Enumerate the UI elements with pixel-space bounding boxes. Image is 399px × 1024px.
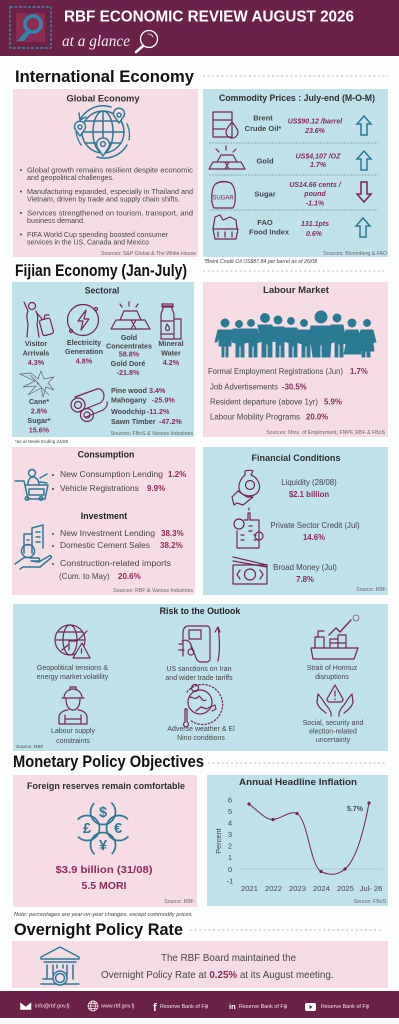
heading: Monetary Policy Objectives: Monetary Policy Objectives — [13, 753, 204, 771]
panel: Labour Market: Sources: Mins. of Employment, FNPF, RBF & FBoS — [266, 430, 386, 436]
footnote: percentages: Note: percentages are year-on-year changes, except commodity prices. — [14, 912, 193, 918]
panel: Overnight Policy Rate — [12, 941, 388, 988]
panel: Sectoral: 4.3% — [28, 358, 45, 367]
line chart: inflation: 6 — [228, 796, 232, 804]
list: timber: -11.2% — [147, 407, 170, 416]
line chart: inflation: 2025 — [337, 884, 354, 893]
text block: global bullets: Vietnam, driven by trade and supply chain shifts. — [27, 196, 180, 204]
text block: global bullets: FIFA World Cup spending boosted consumer — [27, 232, 169, 239]
panel: Financial Conditions: Private Sector Credit (Jul) — [270, 521, 360, 530]
footer: facebook — [153, 1002, 208, 1014]
panel: Sectoral: Water — [161, 348, 181, 358]
risk: geopolitical — [37, 625, 109, 681]
list: timber: Sawn Timber — [111, 417, 156, 426]
icon: money bag — [232, 470, 260, 505]
title: RBF ECONOMIC REVIEW AUGUST 2026 — [64, 8, 354, 26]
panel: Annual Headline Inflation — [207, 775, 388, 906]
row: Gold: US$4,107 /OZ — [296, 154, 341, 160]
panel: Overnight Policy Rate: The RBF Board maintained the — [161, 953, 297, 964]
line chart: inflation: 4 — [228, 818, 232, 828]
panel: Annual Headline Inflation: Source: FBoS — [354, 899, 387, 905]
list: labour: 1.7% — [350, 367, 368, 376]
text block: global bullets: and geopolitical challenges. — [27, 175, 114, 182]
risk: Hormuz: disruptions — [315, 674, 349, 681]
row: Sugar: SUGAR — [212, 196, 234, 202]
footer: facebook: Reserve Bank of Fiji — [160, 1004, 208, 1010]
list: labour — [208, 367, 368, 422]
list: labour: Formal Employment Registrations (Jun) — [208, 367, 343, 376]
row: Brent: 23.6% — [304, 128, 326, 135]
panel: Annual Headline Inflation: Annual Headline Inflation — [239, 777, 357, 787]
row: Brent: US$90.12 /barrel — [288, 118, 343, 126]
risk: sanctions: and wider trade tariffs — [165, 675, 233, 682]
row: Brent: Brent — [253, 114, 273, 122]
icon: magnifier — [136, 30, 158, 52]
panel: Sectoral: Arrivals — [23, 348, 49, 358]
panel: Consumption and Investment: 38.2% — [160, 541, 183, 550]
panel: Consumption and Investment: 20.6% — [118, 572, 141, 581]
list: timber: 3.4% — [149, 386, 166, 395]
panel: Commodity Prices: Commodity Prices : July-end (M-O-M) — [219, 93, 375, 103]
panel: Global Economy — [13, 89, 198, 257]
panel: Sectoral: Electricity — [67, 338, 101, 347]
risk: geopolitical: energy market volatility — [37, 674, 109, 681]
panel: Financial Conditions: Liquidity (28/08) — [281, 478, 337, 487]
panel: Risk to the Outlook: Risk to the Outlook — [160, 606, 240, 616]
risk: social: uncertainty — [316, 737, 351, 744]
footer: youtube — [305, 1003, 369, 1011]
heading: International Economy: International Economy — [15, 68, 195, 86]
panel: Financial Conditions: 7.8% — [296, 575, 314, 584]
heading: Fijian Economy: Fijian Economy (Jan-July) — [15, 262, 187, 280]
panel: Sectoral: Sugar* — [27, 416, 51, 425]
panel: Consumption and Investment: 1.2% — [168, 470, 186, 479]
line chart: inflation: 3 — [228, 830, 232, 839]
panel: Labour Market: Labour Market — [263, 285, 329, 295]
icon: electricity — [68, 304, 98, 336]
risk: social — [303, 685, 363, 744]
list: timber — [111, 386, 182, 426]
icon: cane flower — [20, 371, 54, 397]
list: labour: 20.0% — [306, 412, 328, 422]
line chart: inflation: 2024 — [313, 884, 330, 893]
icon: banknotes — [233, 557, 267, 584]
risk: weather: Adverse weather & El — [167, 726, 235, 733]
icon: logs — [71, 389, 107, 422]
text block: global bullets: business demand. — [27, 218, 85, 225]
panel: Financial Conditions: Financial Conditions — [252, 453, 341, 463]
panel: Labour Market — [203, 282, 388, 437]
footer: website — [88, 1001, 134, 1011]
panel: Sectoral: Concentrates — [106, 342, 152, 350]
risk: weather: Nino conditions — [177, 735, 225, 742]
panel: Consumption and Investment: Construction-related imports — [60, 559, 171, 568]
icon: currency coins — [69, 794, 137, 863]
panel: Sectoral: Cane* — [29, 397, 49, 406]
panel: Consumption and Investment: Sources: RBF & Various Industries — [113, 588, 193, 594]
icon: building — [234, 508, 263, 548]
icon: currency coins: ¥ — [99, 838, 107, 854]
panel: Sectoral: Visitor — [25, 339, 47, 348]
panel: Consumption and Investment: New Investment Lending — [60, 529, 155, 538]
risk: labour: Labour supply — [51, 728, 95, 735]
list: labour: Resident departure (above 1yr) — [210, 398, 318, 406]
panel: Financial Conditions: Source: RBF — [356, 587, 386, 593]
risk: labour — [51, 687, 95, 745]
row: Gold: 1.7% — [310, 162, 327, 169]
panel: Financial Conditions: Broad Money (Jul) — [273, 563, 337, 572]
icon: currency coins: € — [114, 821, 122, 837]
risk: social: election-related — [309, 728, 357, 736]
panel: Foreign reserves: 5.5 MORI — [82, 880, 127, 892]
panel: Risk to the Outlook — [13, 604, 388, 751]
risk: Hormuz: Strait of Hormuz — [307, 665, 358, 672]
panel: Consumption and Investment: Vehicle Registrations — [60, 484, 139, 493]
footer: facebook: f — [153, 1002, 157, 1014]
risk: labour: constraints — [56, 738, 90, 745]
panel: Foreign reserves — [13, 775, 197, 907]
panel: Financial Conditions: $2.1 billion — [289, 490, 329, 499]
header banner — [0, 0, 399, 56]
footer: email: info@rbf.gov.fj — [35, 1004, 69, 1010]
icon: visitor — [24, 302, 54, 337]
text block: global bullets: Global growth remains resilient despite economic — [27, 168, 194, 174]
panel: Sectoral — [12, 282, 194, 437]
line chart: inflation: 2021 — [241, 884, 258, 893]
line chart: inflation: 2023 — [289, 884, 306, 893]
line chart: inflation: 2 — [228, 842, 232, 850]
icon: globe with pins — [74, 106, 129, 158]
panel: Consumption and Investment: Consumption — [78, 450, 134, 460]
panel: Consumption and Investment: 38.3% — [161, 529, 184, 538]
text block: global bullets — [20, 168, 194, 246]
panel: Sectoral: Sectoral — [85, 286, 119, 296]
panel: Commodity Prices — [203, 89, 388, 257]
panel: Overnight Policy Rate: Overnight Policy Rate at 0.25% at its August meeting. — [101, 970, 334, 981]
list: timber: -47.2% — [159, 417, 182, 426]
panel: Commodity Prices: Sources: Bloomberg & FAO — [323, 251, 387, 257]
icon: investment — [15, 525, 51, 569]
icon: currency coins: $ — [99, 805, 107, 821]
footer: email — [20, 1002, 69, 1010]
icon: shopping — [15, 470, 48, 500]
risk: geopolitical: Geopolitical tensions & — [37, 665, 108, 672]
text block: global bullets: Manufacturing expanded, especially in Thailand and — [27, 189, 193, 196]
panel: Foreign reserves: Source: RBF — [164, 899, 194, 905]
row: FAO: 131.1pts — [301, 221, 329, 228]
footer: linkedin — [229, 1002, 287, 1011]
subtitle: at a glance — [62, 33, 130, 50]
list: timber: -25.9% — [152, 396, 175, 404]
line chart: inflation: 2022 — [265, 884, 282, 893]
panel: Sectoral: 15.6% — [29, 426, 50, 434]
row: Brent — [213, 112, 371, 138]
risk: weather — [167, 684, 235, 742]
line chart: inflation — [214, 796, 383, 893]
row: Sugar: pound — [303, 191, 326, 198]
panel: Foreign reserves: $3.9 billion (31/08) — [56, 864, 152, 876]
line chart: inflation: 1 — [228, 853, 232, 862]
panel: Sectoral: 2.8% — [31, 406, 48, 416]
line chart: inflation: -1 — [227, 876, 233, 886]
line chart: inflation: 5.7% — [347, 806, 364, 813]
row: Sugar: -1.1% — [306, 200, 325, 208]
icon: water — [161, 304, 181, 339]
panel: Sectoral: 4.8% — [76, 356, 93, 366]
subheading: Investment: Investment — [81, 511, 127, 521]
heading: Overnight Policy Rate: Overnight Policy Rate — [14, 921, 183, 939]
list: labour: -30.5% — [282, 382, 307, 392]
line chart: inflation: Jul- 26 — [360, 884, 382, 893]
row: FAO — [213, 215, 370, 239]
footnote: Brent: *Brent Crude Oil US$87.84 per barrel as of 26/08 — [204, 259, 317, 265]
panel: Sectoral: Mineral — [158, 339, 184, 348]
row: Gold — [209, 146, 371, 170]
list: labour: Labour Mobility Programs — [210, 412, 300, 422]
panel: Sectoral: Sources: FBoS & Various Industries — [111, 431, 193, 437]
panel: Sectoral: Generation — [65, 347, 103, 356]
panel: Consumption and Investment: Domestic Cement Sales — [60, 541, 150, 550]
line chart: inflation: 5 — [228, 807, 232, 816]
text block: global bullets: Services strengthened on tourism, transport, and — [27, 210, 193, 218]
risk: social: Social, security and — [303, 720, 363, 727]
panel: Sectoral: -21.8% — [117, 368, 140, 377]
footer: website: www.rbf.gov.fj — [100, 1004, 134, 1010]
footer bar — [0, 991, 399, 1018]
icon: currency coins: £ — [83, 821, 91, 837]
panel: Risk to the Outlook: Source: RBF — [16, 744, 44, 750]
list: timber: Woodchip — [111, 407, 146, 416]
row: Gold: Gold — [256, 156, 274, 166]
icon: gold bars — [111, 302, 150, 329]
footer: youtube: Reserve Bank of Fiji — [321, 1004, 369, 1010]
row: FAO: Food Index — [249, 228, 290, 236]
panel: Consumption and Investment — [12, 447, 195, 595]
panel: Sectoral: 4.2% — [163, 358, 180, 367]
panel: Foreign reserves: Foreign reserves remain comfortable — [27, 781, 185, 791]
list: labour: Job Advertisements — [210, 382, 278, 392]
text block: global bullets: services in the US, Canada and Mexico — [27, 240, 149, 246]
row: Sugar: US14.66 cents / — [289, 182, 342, 189]
line chart: inflation: 0 — [228, 865, 232, 874]
panel: Financial Conditions — [203, 447, 388, 595]
row: Sugar: Sugar — [254, 190, 276, 198]
risk: Hormuz — [307, 615, 359, 681]
icon: workers — [215, 311, 376, 357]
panel: Sectoral: Gold — [121, 333, 137, 342]
footer: linkedin: Reserve Bank of Fiji — [239, 1004, 287, 1010]
row: Sugar — [212, 182, 371, 208]
panel: Financial Conditions: 14.6% — [303, 533, 325, 542]
line chart: inflation: Percent — [214, 828, 223, 854]
panel: Consumption and Investment: 9.9% — [147, 484, 165, 493]
risk: sanctions: US sanctions on Iran — [167, 666, 232, 673]
list: labour: 5.9% — [324, 398, 342, 406]
panel: Consumption and Investment: New Consumption Lending — [60, 470, 163, 479]
row: Brent: Crude Oil* — [245, 124, 281, 133]
icon: bank — [41, 947, 79, 985]
panel: Consumption and Investment: (Cum. to May) — [59, 572, 110, 581]
risk: sanctions — [165, 626, 233, 682]
footnote: week ending: *as at Week Ending 24/08 — [15, 439, 68, 444]
list: timber: Mahogany — [111, 396, 147, 404]
row: FAO: FAO — [257, 218, 273, 227]
panel: Sectoral: Gold Doré — [111, 359, 145, 368]
panel: Global Economy: Sources: S&P Global & The White House — [101, 251, 196, 257]
panel: Global Economy: Global Economy — [66, 94, 140, 104]
list: timber: Pine wood — [111, 386, 147, 395]
row: FAO: 0.6% — [306, 231, 323, 238]
icon: RBF logo — [10, 7, 51, 48]
panel: Sectoral: 58.8% — [119, 350, 140, 358]
footer: linkedin: in — [229, 1002, 236, 1011]
